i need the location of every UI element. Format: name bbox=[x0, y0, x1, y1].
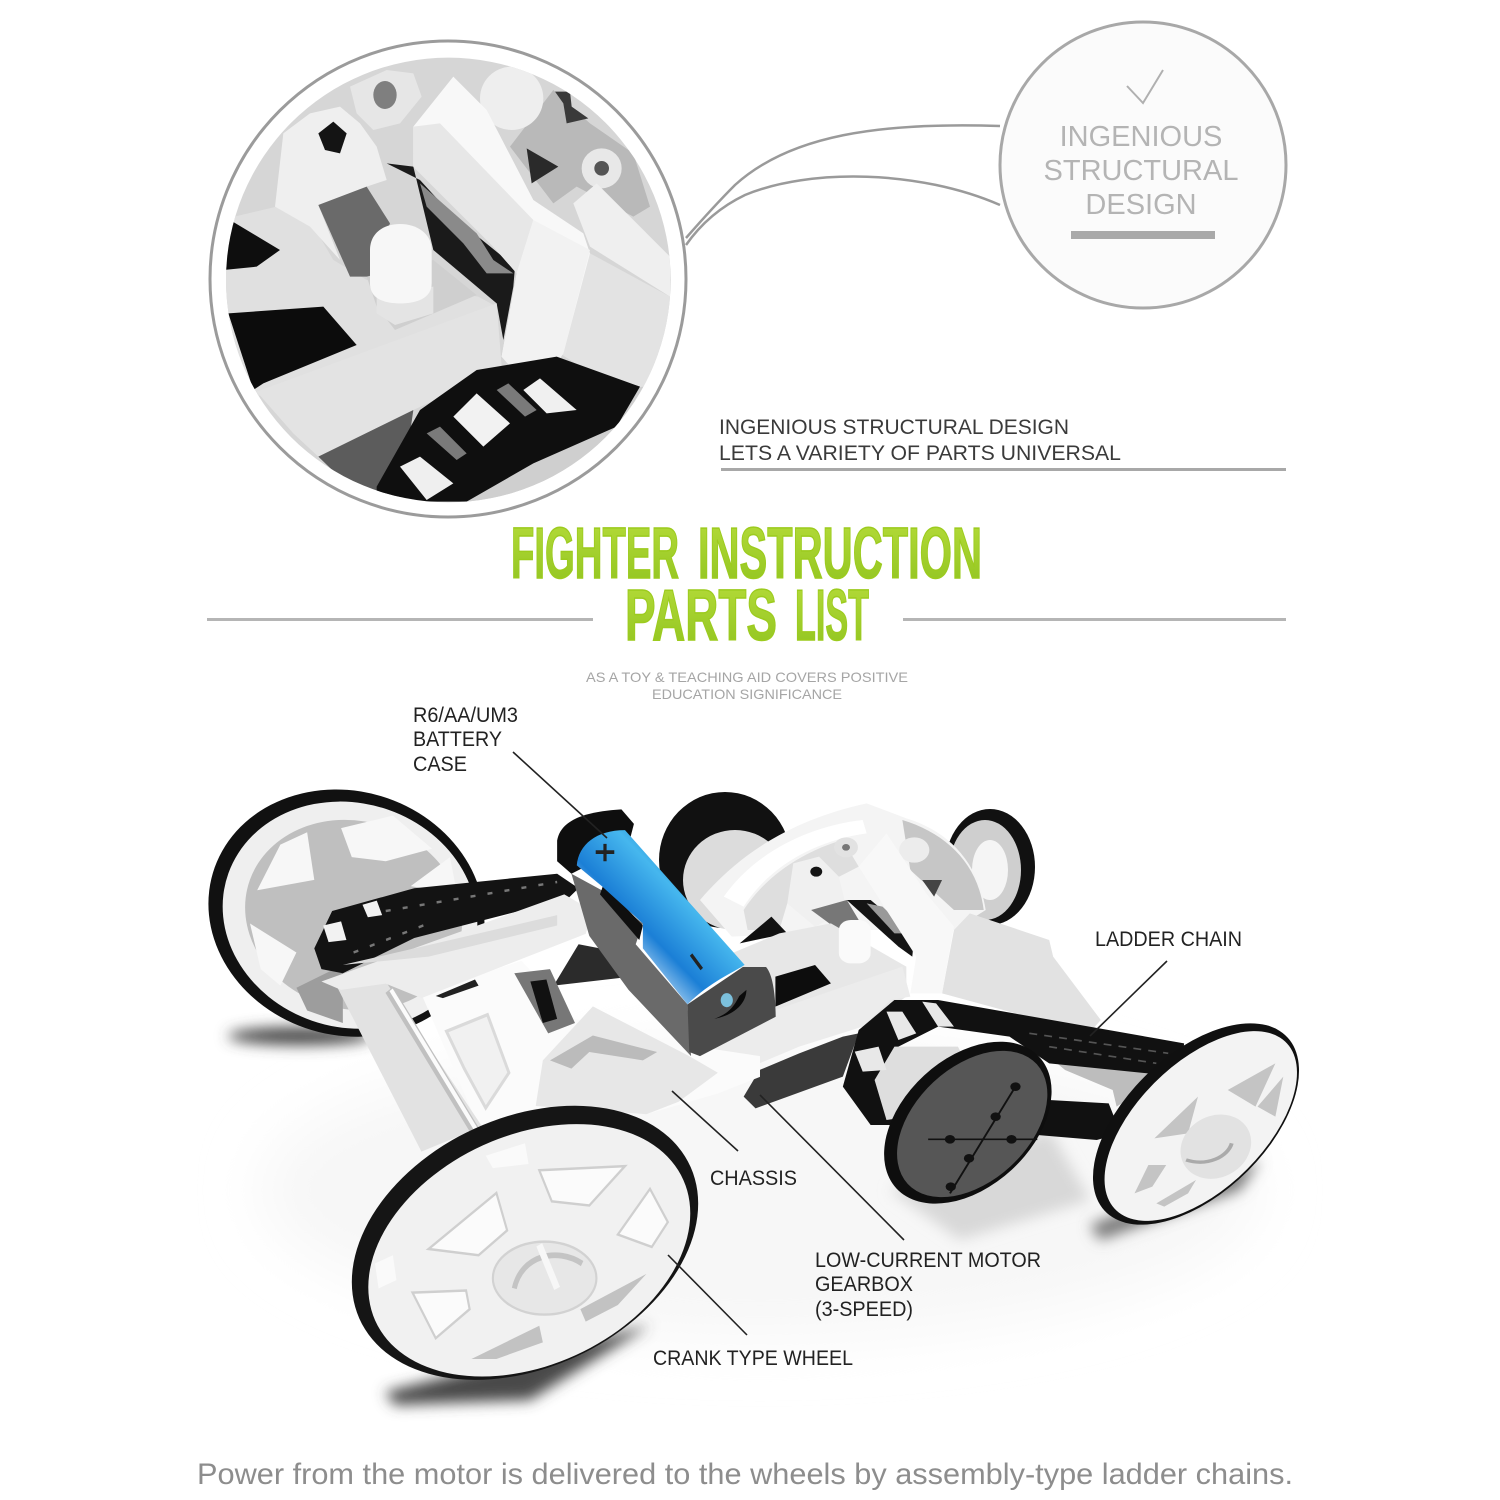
label: battery case: CASE bbox=[413, 753, 467, 776]
text block: design description bbox=[719, 415, 1286, 471]
title: FIGHTER bbox=[511, 514, 679, 594]
wheel: front right bbox=[1052, 993, 1340, 1255]
ladder chain: rear bbox=[314, 874, 579, 973]
wheels: far side bbox=[659, 792, 1035, 930]
text block: design description: INGENIOUS STRUCTURAL DESIGN bbox=[719, 415, 1069, 439]
label: motor gearbox: GEARBOX bbox=[815, 1273, 913, 1296]
label: ladder chain: LADDER CHAIN bbox=[1095, 928, 1242, 951]
icon: check mark bbox=[1127, 70, 1163, 103]
caption: Power from the motor is delivered to the wheels by assembly-type ladder chains. bbox=[197, 1458, 1293, 1491]
text block: design description: LETS A VARIETY OF PARTS UNIVERSAL bbox=[719, 441, 1121, 465]
ground shadows bbox=[228, 1027, 1260, 1405]
battery bbox=[577, 830, 745, 1004]
label: motor gearbox: (3-SPEED) bbox=[815, 1298, 913, 1321]
badge label: DESIGN bbox=[1085, 189, 1197, 221]
subtitle: EDUCATION SIGNIFICANCE bbox=[652, 686, 842, 702]
badge label: STRUCTURAL bbox=[1044, 155, 1238, 187]
subtitle bbox=[586, 669, 908, 702]
label: battery case bbox=[413, 704, 518, 776]
callout: ingenious structural design badge bbox=[1000, 22, 1286, 308]
chain behind chassis bbox=[554, 944, 625, 986]
subtitle: AS A TOY & TEACHING AID COVERS POSITIVE bbox=[586, 669, 908, 685]
title bbox=[511, 514, 982, 656]
title: PARTS bbox=[625, 576, 777, 656]
label: motor gearbox: LOW-CURRENT MOTOR bbox=[815, 1249, 1041, 1272]
gearbox bbox=[744, 1033, 859, 1108]
label: battery case: BATTERY bbox=[413, 728, 502, 751]
illustration: climbing vehicle bbox=[194, 769, 1340, 1428]
panel: zoomed structure detail circle bbox=[210, 41, 686, 517]
title: LIST bbox=[795, 576, 869, 656]
strut bbox=[1057, 1063, 1164, 1107]
label: motor gearbox bbox=[815, 1249, 1041, 1321]
left half of vehicle bbox=[194, 769, 776, 1428]
chassis box bbox=[700, 920, 910, 1093]
label: battery case: R6/AA/UM3 bbox=[413, 704, 518, 727]
badge label bbox=[1044, 121, 1238, 221]
label: chassis: CHASSIS bbox=[710, 1167, 797, 1190]
right half of vehicle bbox=[700, 803, 1340, 1255]
callout lines bbox=[513, 752, 1167, 1335]
wheel: black hub bbox=[850, 1015, 1086, 1230]
infographic canvas bbox=[200, 20, 1299, 1490]
wheel: rear left bbox=[194, 769, 498, 1057]
wheel: front left crank bbox=[321, 1058, 729, 1428]
ladder chain: upper and loop bbox=[843, 1000, 1184, 1125]
battery case bbox=[557, 809, 776, 1056]
chassis body bbox=[321, 894, 760, 1152]
badge label: INGENIOUS bbox=[1060, 121, 1222, 153]
ladder chain: lower bbox=[1037, 1100, 1121, 1140]
right triangle body bbox=[942, 913, 1101, 1033]
title: INSTRUCTION bbox=[698, 514, 982, 594]
arc plate and upper structure bbox=[700, 803, 986, 957]
connector lines to callout bbox=[686, 125, 1000, 245]
label: crank type wheel: CRANK TYPE WHEEL bbox=[653, 1347, 853, 1370]
white bracket bbox=[859, 833, 954, 993]
